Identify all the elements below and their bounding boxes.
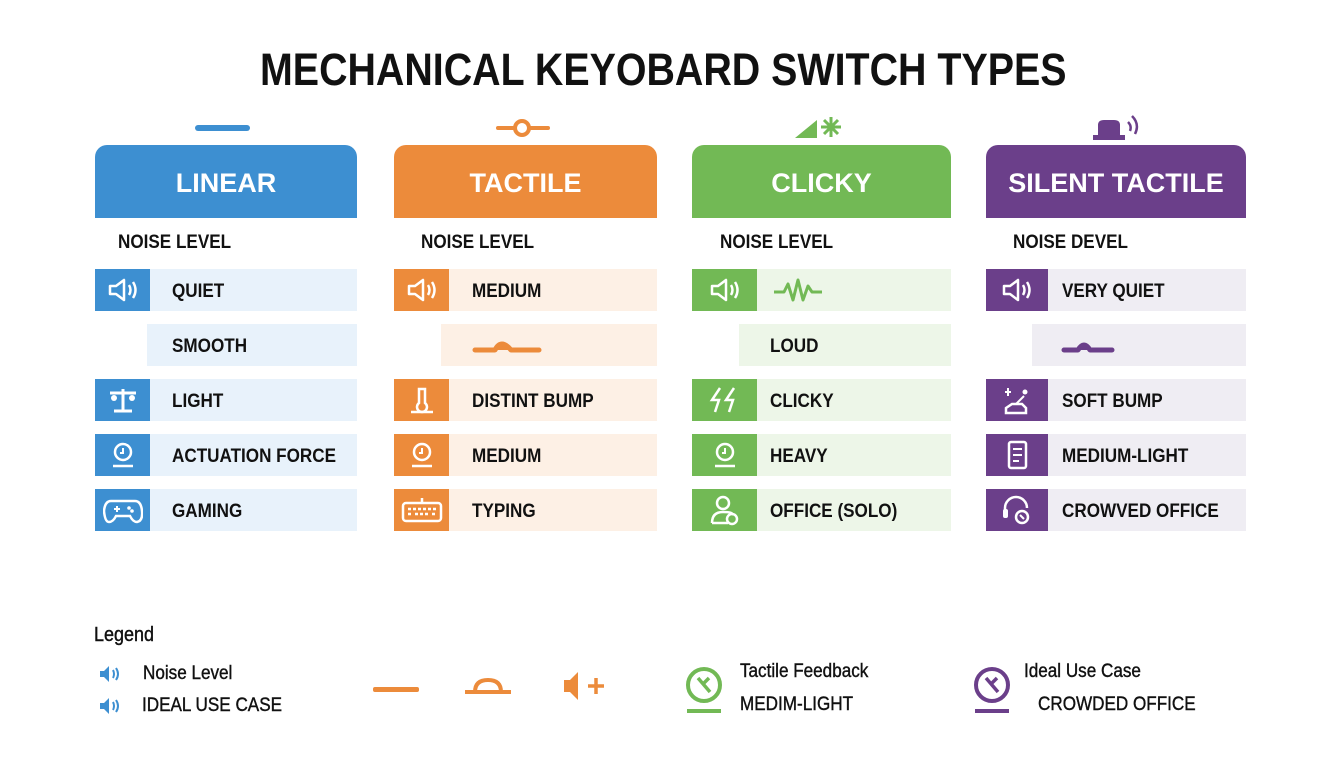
legend item: ideal use case: Ideal Use Case <box>1024 661 1141 682</box>
row: medium-light: MEDIUM-LIGHT <box>1062 446 1188 467</box>
row: light <box>95 379 357 421</box>
icon: tactile bump <box>496 119 550 137</box>
row: smooth <box>147 324 357 366</box>
label: noise devel: NOISE DEVEL <box>1013 232 1128 253</box>
legend icon: bump <box>465 678 511 694</box>
legend item: noise level <box>100 663 232 684</box>
label: noise level: NOISE LEVEL <box>720 232 833 253</box>
legend item: tactile feedback: Tactile Feedback <box>740 661 868 682</box>
header: linear: LINEAR <box>176 168 276 198</box>
header: linear <box>95 145 357 218</box>
row: distint bump: DISTINT BUMP <box>472 391 594 412</box>
row: quiet <box>95 269 357 311</box>
label: noise level: NOISE LEVEL <box>421 232 534 253</box>
header: tactile <box>394 145 657 218</box>
legend item: noise level: Noise Level <box>143 663 232 684</box>
header: silent tactile: SILENT TACTILE <box>1008 168 1224 198</box>
icon: clicky <box>795 117 841 138</box>
row: very quiet: VERY QUIET <box>1062 281 1165 302</box>
row: light: LIGHT <box>172 391 223 412</box>
header: clicky <box>692 145 951 218</box>
row: soft bump: SOFT BUMP <box>1062 391 1163 412</box>
title: MECHANICAL KEYOBARD SWITCH TYPES <box>260 44 1067 95</box>
row: medium-light <box>986 434 1246 476</box>
row: heavy: HEAVY <box>770 446 828 467</box>
row: actuation force <box>95 434 357 476</box>
panel: linear <box>95 145 357 531</box>
header: tactile: TACTILE <box>470 168 581 198</box>
row: quiet: QUIET <box>172 281 224 302</box>
label: noise level: NOISE LEVEL <box>118 232 231 253</box>
row: typing: TYPING <box>472 501 536 522</box>
row: gaming <box>95 489 357 531</box>
legend item: ideal use case: IDEAL USE CASE <box>142 695 282 716</box>
row: office solo <box>692 489 951 531</box>
header: clicky: CLICKY <box>771 168 872 198</box>
legend icon: speaker plus <box>564 672 604 700</box>
row: bump graphic <box>441 324 657 366</box>
row: clicky <box>692 379 951 421</box>
row: loud: LOUD <box>770 336 818 357</box>
row: medium <box>394 269 657 311</box>
panel: tactile <box>394 145 657 531</box>
legend item: tactile feedback <box>686 661 869 715</box>
row: medium force: MEDIUM <box>472 446 541 467</box>
row: loud <box>739 324 951 366</box>
row: crowded office <box>986 489 1246 531</box>
row: medium: MEDIUM <box>472 281 541 302</box>
row: very quiet <box>986 269 1246 311</box>
row: medium force <box>394 434 657 476</box>
legend item: ideal use case: CROWDED OFFICE <box>1038 694 1196 715</box>
legend icon: linear line <box>373 687 419 692</box>
row: crowded office: CROWVED OFFICE <box>1062 501 1219 522</box>
row: noise wave <box>692 269 951 311</box>
legend <box>94 624 1196 716</box>
icon: silent <box>1093 115 1138 140</box>
legend item: ideal use case <box>974 661 1196 715</box>
icon: linear line <box>195 125 250 131</box>
panel: clicky <box>692 145 951 531</box>
header: silent tactile <box>986 145 1246 218</box>
row: clicky: CLICKY <box>770 391 834 412</box>
row: actuation force: ACTUATION FORCE <box>172 446 336 467</box>
legend title: Legend <box>94 624 154 646</box>
row: soft bump graphic <box>1032 324 1246 366</box>
row: typing <box>394 489 657 531</box>
row: gaming: GAMING <box>172 501 242 522</box>
legend item: tactile feedback: MEDIM-LIGHT <box>740 694 853 715</box>
panel: silent tactile <box>986 145 1246 531</box>
row: distint bump <box>394 379 657 421</box>
row: heavy <box>692 434 951 476</box>
row: office solo: OFFICE (SOLO) <box>770 501 897 522</box>
row: smooth: SMOOTH <box>172 336 247 357</box>
row: soft bump <box>986 379 1246 421</box>
